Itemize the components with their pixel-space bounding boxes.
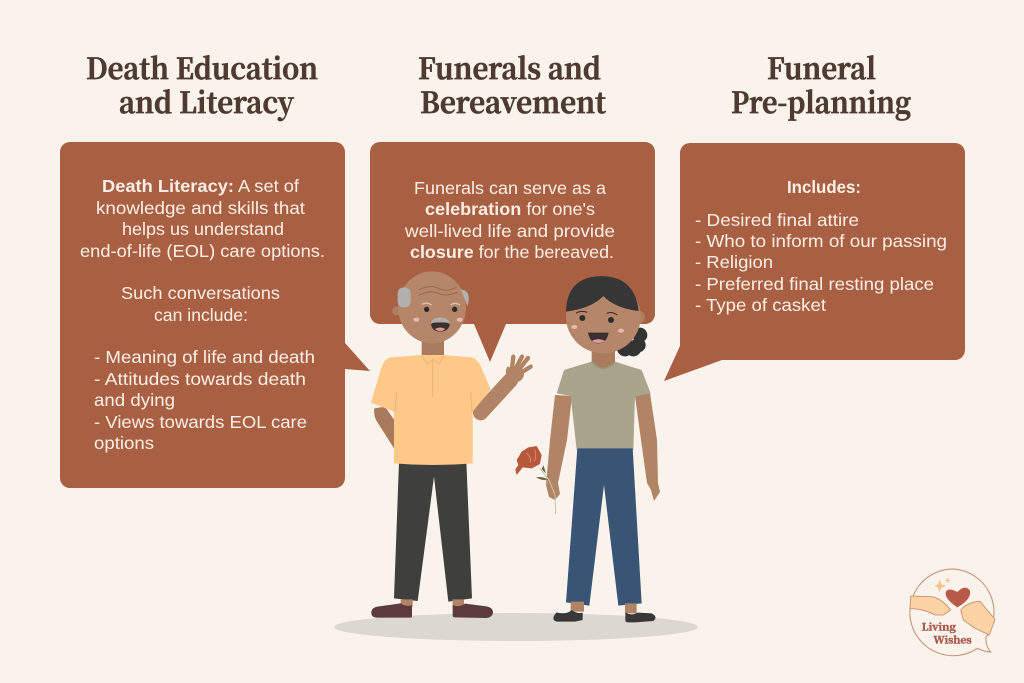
funerals text: well-lived life and provide <box>404 221 615 241</box>
funerals text <box>404 178 615 262</box>
death literacy text: - Attitudes towards death <box>94 369 306 389</box>
woman's arms <box>546 395 572 500</box>
logo text: Wishes <box>933 632 972 646</box>
death literacy text: Such conversations <box>121 283 280 303</box>
pre-planning text: - Preferred final resting place <box>695 274 934 294</box>
heading: Funerals and Bereavement <box>418 47 607 122</box>
panel: pre-planning speech bubble <box>664 143 965 381</box>
pre-planning text: - Who to inform of our passing <box>695 231 947 251</box>
pre-planning text: Includes: <box>787 177 861 197</box>
flower <box>515 446 556 514</box>
icon: right hand <box>961 601 995 635</box>
waving hand <box>507 357 531 382</box>
death literacy text: can include: <box>154 305 248 325</box>
icon: heart <box>946 588 970 607</box>
death literacy text: options <box>94 433 154 453</box>
pre-planning text: - Desired final attire <box>695 210 859 230</box>
heading: Death Education and Literacy <box>86 47 318 122</box>
death literacy text: - Meaning of life and death <box>94 347 315 367</box>
heading: Funeral Pre-planning <box>731 47 911 122</box>
pre-planning text: - Religion <box>695 252 773 272</box>
death literacy text: knowledge and skills that <box>96 198 305 218</box>
illustration: woman holding flower <box>515 276 660 622</box>
funerals text: Funerals can serve as a <box>414 178 606 198</box>
logo: Living Wishes <box>910 569 995 656</box>
death literacy text: Death Literacy: A set of <box>102 176 299 196</box>
funerals text: closure for the bereaved. <box>410 242 614 262</box>
death literacy text: helps us understand <box>122 219 284 239</box>
heading: Funeral Pre-planning: Pre-planning <box>731 81 911 122</box>
heading: Funeral Pre-planning: Funeral <box>767 47 876 88</box>
panel: death literacy speech bubble <box>60 142 370 488</box>
pre-planning text <box>695 177 947 315</box>
icon: sparkles <box>934 578 951 592</box>
death literacy text <box>80 176 325 453</box>
death literacy text: end-of-life (EOL) care options. <box>80 241 325 261</box>
panel: funerals speech bubble <box>370 142 655 362</box>
icon: left hand <box>910 596 951 615</box>
heading: Funerals and Bereavement: Bereavement <box>420 81 607 122</box>
heading: Funerals and Bereavement: Funerals and <box>418 47 601 88</box>
pre-planning text: - Type of casket <box>695 295 826 315</box>
funerals text: celebration for one's <box>425 199 595 219</box>
death literacy text: and dying <box>94 390 175 410</box>
illustration: elderly man <box>371 271 531 618</box>
logo text: Living <box>922 620 956 634</box>
logo text <box>922 620 972 646</box>
death literacy text: - Views towards EOL care <box>94 412 307 432</box>
heading: Death Education and Literacy: Death Education <box>86 47 318 88</box>
ground shadow <box>334 613 698 641</box>
heading: Death Education and Literacy: and Literacy <box>119 81 294 122</box>
